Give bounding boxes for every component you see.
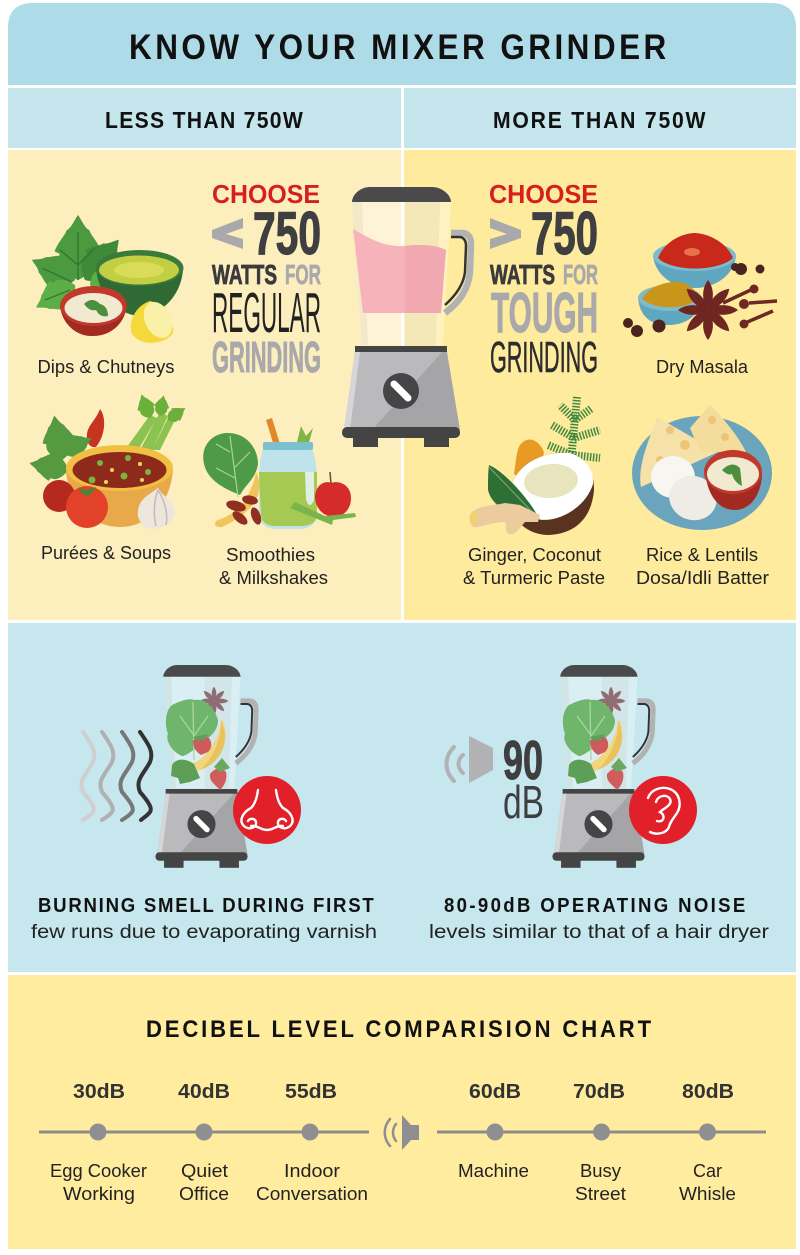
text: GRINDING bbox=[490, 333, 598, 382]
icon: rising smell waves bbox=[81, 732, 151, 820]
text block: choose under 750 watts: FOR bbox=[285, 259, 321, 290]
icon: chart speaker bbox=[385, 1115, 419, 1150]
chart: quieter scale bbox=[39, 1081, 369, 1204]
text block: operating noise: levels similar to that of a hair dryer bbox=[429, 922, 770, 943]
panel: less than 750W heading: LESS THAN 750W bbox=[105, 107, 303, 133]
text block: choose over 750 watts: CHOOSE bbox=[489, 181, 598, 209]
label: dips and chutneys: Dips & Chutneys bbox=[38, 357, 174, 377]
chart: quieter scale: 55dB bbox=[285, 1081, 337, 1103]
label: ginger coconut turmeric paste: Ginger, Coconut bbox=[468, 545, 601, 565]
text: 90 dB: dB bbox=[503, 776, 544, 828]
illustration: dips and chutneys bbox=[25, 215, 184, 343]
panel: less than 750W heading bbox=[8, 88, 401, 148]
panel: header bbox=[8, 3, 796, 85]
illustration: rice and lentil dosa idli bbox=[632, 405, 772, 530]
text: 90 dB bbox=[503, 729, 544, 828]
illustration: ginger coconut turmeric bbox=[470, 397, 600, 535]
chart: quieter scale: Office bbox=[179, 1184, 229, 1204]
illustration: main blender with pink smoothie bbox=[342, 187, 471, 447]
text block: choose under 750 watts: 750 bbox=[253, 200, 321, 267]
chart: louder scale: Street bbox=[575, 1184, 626, 1204]
text: REGULAR bbox=[212, 281, 321, 345]
chart: quieter scale: Conversation bbox=[256, 1184, 368, 1204]
chart: louder scale: Whisle bbox=[679, 1184, 736, 1204]
chart: quieter scale: 40dB bbox=[178, 1081, 230, 1103]
illustration: blender with noise bbox=[552, 665, 653, 868]
label: rice and lentils dosa idli batter: Rice & Lentils bbox=[646, 545, 758, 565]
illustration: blender with burning smell bbox=[155, 665, 256, 868]
panel: less than 750W background bbox=[8, 150, 401, 620]
label: ginger coconut turmeric paste: & Turmeric Paste bbox=[463, 568, 605, 588]
illustration: purees and soups bbox=[27, 391, 190, 529]
illustration: dry masala bbox=[623, 233, 777, 340]
panel: smell and noise background bbox=[8, 623, 796, 972]
chart: louder scale bbox=[437, 1081, 766, 1204]
icon: red ear badge bbox=[629, 776, 697, 844]
label: ginger coconut turmeric paste bbox=[463, 545, 605, 588]
label: smoothies and milkshakes: Smoothies bbox=[226, 545, 315, 565]
text block: burning smell: few runs due to evaporating varnish bbox=[31, 922, 377, 943]
text block: choose under 750 watts bbox=[212, 181, 321, 382]
label: rice and lentils dosa idli batter: Dosa/Idli Batter bbox=[636, 568, 769, 588]
text block: choose over 750 watts: 750 bbox=[531, 200, 598, 267]
label: dry masala: Dry Masala bbox=[656, 357, 749, 377]
text: 90 dB: 90 bbox=[503, 729, 543, 791]
panel: more than 750W background bbox=[404, 150, 796, 620]
chart: quieter scale: 30dB bbox=[73, 1081, 125, 1103]
panel: more than 750W heading: MORE THAN 750W bbox=[493, 107, 706, 133]
text block: choose under 750 watts: WATTS bbox=[212, 259, 277, 290]
text block: operating noise: 80-90dB OPERATING NOISE bbox=[444, 895, 745, 917]
illustration: smoothies and milkshakes bbox=[203, 418, 356, 529]
label: smoothies and milkshakes bbox=[219, 545, 328, 588]
title: KNOW YOUR MIXER GRINDER bbox=[129, 29, 666, 67]
text: GRINDING bbox=[212, 333, 321, 382]
chart: louder scale: 70dB bbox=[573, 1081, 625, 1103]
text block: choose over 750 watts: TOUGH bbox=[491, 281, 598, 345]
chart: louder scale: 80dB bbox=[682, 1081, 734, 1103]
icon: red nose badge bbox=[233, 776, 301, 844]
icon: speaker volume bbox=[446, 736, 493, 783]
label: smoothies and milkshakes: & Milkshakes bbox=[219, 568, 328, 588]
chart: quieter scale: Indoor bbox=[284, 1161, 340, 1181]
chart: louder scale: Machine bbox=[458, 1161, 529, 1181]
text block: choose over 750 watts bbox=[489, 181, 598, 382]
chart title: DECIBEL LEVEL COMPARISION CHART bbox=[146, 1015, 651, 1042]
chart: louder scale: Car bbox=[693, 1161, 722, 1181]
text block: operating noise bbox=[429, 895, 770, 943]
chart: quieter scale: Working bbox=[63, 1184, 135, 1204]
text block: choose over 750 watts: WATTS bbox=[490, 259, 555, 290]
chart: quieter scale: Egg Cooker bbox=[50, 1161, 147, 1181]
text block: burning smell: BURNING SMELL DURING FIRST bbox=[38, 895, 374, 917]
panel: more than 750W heading bbox=[404, 88, 796, 148]
chart: quieter scale: Quiet bbox=[181, 1161, 228, 1181]
label: rice and lentils dosa idli batter bbox=[636, 545, 769, 588]
text block: choose over 750 watts: FOR bbox=[563, 259, 598, 290]
chart: louder scale: 60dB bbox=[469, 1081, 521, 1103]
chart: louder scale: Busy bbox=[580, 1161, 621, 1181]
text block: burning smell bbox=[31, 895, 377, 943]
panel: decibel comparison bbox=[8, 975, 796, 1249]
label: purees and soups: Purées & Soups bbox=[41, 543, 171, 563]
text block: choose under 750 watts: CHOOSE bbox=[212, 181, 320, 209]
